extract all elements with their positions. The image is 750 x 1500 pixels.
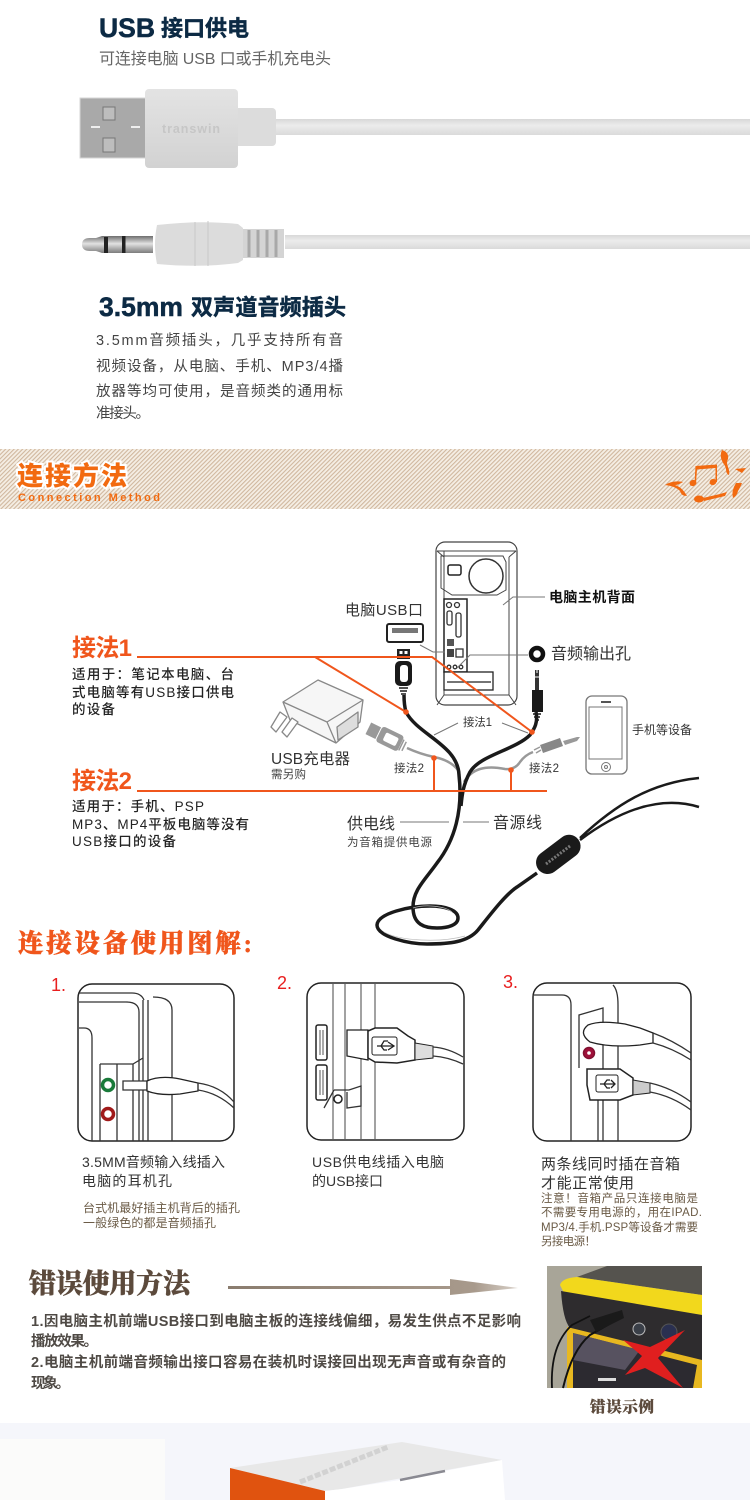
heading: 3.5mm plug: 双声道音频插头: [191, 295, 346, 320]
gray cable: USB charger connection: [365, 721, 458, 770]
text: method 1 description: 的设备: [72, 701, 116, 717]
label: USB charger: [271, 750, 350, 781]
icon: phone: [586, 696, 627, 774]
step 2 number: 2.: [277, 973, 292, 993]
icon: USB charger: [271, 680, 363, 743]
heading: method 1: 接法1: [72, 635, 132, 662]
label: method 2 right: 接法2: [529, 761, 559, 775]
photo: 3.5mm audio plug and cable: [82, 221, 750, 266]
banner subtitle: Connection Method: [18, 492, 160, 504]
text: step 3 caption: 两条线同时插在音箱: [541, 1156, 680, 1173]
text: wrong usage explanation: 1.因电脑主机前端USB接口到电脑主板的连接线偏细，易发生供点不足影响: [31, 1312, 521, 1330]
text: method 1 description: 式电脑等有USB接口供电: [72, 684, 234, 700]
arrow: [228, 1279, 518, 1295]
label: power cable: 供电线: [347, 815, 395, 833]
text: step 1 note: 一般绿色的都是音频插孔: [83, 1215, 216, 1230]
text: step 1 caption: [82, 1154, 225, 1189]
step 3 number: 3.: [503, 972, 518, 992]
text: USB subtitle: 可连接电脑 USB 口或手机充电头: [99, 50, 331, 68]
text: step 2 caption: 的USB接口: [312, 1173, 383, 1189]
black cable: audio cable: [461, 670, 543, 806]
text: method 1 description: 适用于：笔记本电脑、台: [72, 666, 234, 682]
panel: step 1 illustration: [78, 984, 234, 1141]
label: power cable: 为音箱提供电源: [347, 835, 432, 849]
label: method 2 left: 接法2: [394, 761, 424, 775]
label: audio output: [457, 645, 631, 668]
label: USB charger: 需另购: [271, 767, 306, 781]
text: 3.5mm description: [96, 332, 344, 422]
gray cable: phone audio connection: [464, 737, 580, 782]
text: method 2 description: 适用于：手机、PSP: [72, 798, 204, 814]
heading: 3.5mm plug: [99, 292, 346, 322]
label: audio cable: [463, 814, 542, 832]
step 1 number: 1.: [51, 975, 66, 995]
text: step 3 note: [541, 1191, 702, 1248]
banner heading: 连接方法: [17, 461, 127, 491]
text: method 1 description: [72, 666, 234, 717]
orange lines: method 1: [137, 657, 535, 735]
photo: wrong example: [547, 1266, 702, 1388]
icon: inline remote control: [531, 778, 699, 879]
text: step 2 caption: USB供电线插入电脑: [312, 1154, 444, 1170]
icon: music notes: [665, 450, 746, 502]
label: method 1 centre: 接法1: [463, 715, 492, 729]
text: wrong usage explanation: [31, 1312, 521, 1392]
black cable: USB power cable: [377, 649, 537, 944]
panel: step 3 illustration: [533, 983, 691, 1141]
photo: USB plug and cable: [80, 89, 750, 168]
text: step 1 note: [83, 1200, 240, 1230]
label: computer back: 电脑主机背面: [549, 589, 635, 605]
text: wrong usage explanation: 2.电脑主机前端音频输出接口容易在装机时误接回出现无声音或有杂音的: [31, 1353, 506, 1371]
heading: wrong usage: 错误使用方法: [28, 1268, 193, 1299]
text: 3.5mm description: 放器等均可使用，是音频类的通用标: [96, 382, 343, 400]
photo: product box: [230, 1442, 505, 1500]
heading: USB power: [99, 13, 249, 43]
text: 3.5mm description: 3.5mm音频插头，几乎支持所有音: [96, 332, 343, 349]
heading: usage illustration: 连接设备使用图解:: [18, 929, 252, 958]
label: USB charger: USB充电器: [271, 750, 350, 768]
photo: USB plug and cable: transwin: [162, 122, 220, 136]
text: 3.5mm description: 准接头。: [96, 405, 150, 422]
label: computer back: [503, 589, 635, 605]
text: step 1 caption: 电脑的耳机孔: [82, 1173, 172, 1189]
diagram: computer tower back: [436, 542, 517, 705]
text: method 2 description: MP3、MP4平板电脑等没有: [72, 816, 249, 832]
label: phone: 手机等设备: [632, 723, 692, 737]
icon: red cross: [623, 1330, 685, 1388]
text: step 3 note: 另接电源！: [541, 1234, 596, 1248]
label: audio output: 音频输出孔: [551, 645, 631, 663]
heading: USB power: 接口供电: [161, 16, 249, 41]
text: method 2 description: [72, 798, 249, 849]
text: step 1 caption: 3.5MM音频输入线插入: [82, 1154, 225, 1170]
label: audio cable: 音源线: [493, 814, 542, 832]
text: step 3 note: 注意！音箱产品只连接电脑是: [541, 1191, 698, 1205]
banner: connection method: [0, 449, 750, 509]
text: method 2 description: USB接口的设备: [72, 833, 176, 849]
heading: USB power: USB: [99, 13, 155, 43]
label: wrong example: 错误示例: [589, 1397, 654, 1416]
text: step 3 caption: [541, 1156, 680, 1192]
text: step 1 note: 台式机最好插主机背后的插孔: [83, 1200, 240, 1215]
heading: method 2: 接法2: [72, 768, 132, 795]
label: computer USB port: 电脑USB口: [345, 602, 423, 619]
label: method 1 centre: [434, 715, 528, 735]
text: wrong usage explanation: 播放效果。: [31, 1332, 98, 1350]
label: power cable: [347, 815, 449, 849]
text: step 3 note: MP3/4.手机.PSP等设备才需要: [541, 1220, 698, 1234]
text: 3.5mm description: 视频设备，从电脑、手机、MP3/4播: [96, 358, 344, 375]
text: step 2 caption: [312, 1154, 444, 1189]
text: step 3 caption: 才能正常使用: [541, 1175, 634, 1192]
text: wrong usage explanation: 现象。: [31, 1374, 70, 1392]
orange lines: method 2: [137, 755, 547, 791]
panel: step 2 illustration: [307, 983, 464, 1140]
label: computer USB port: [345, 602, 445, 652]
text: step 3 note: 不需要专用电源的，用在IPAD.: [541, 1205, 702, 1219]
panel: bottom product area: [0, 1423, 750, 1500]
heading: 3.5mm plug: 3.5mm: [99, 292, 183, 322]
